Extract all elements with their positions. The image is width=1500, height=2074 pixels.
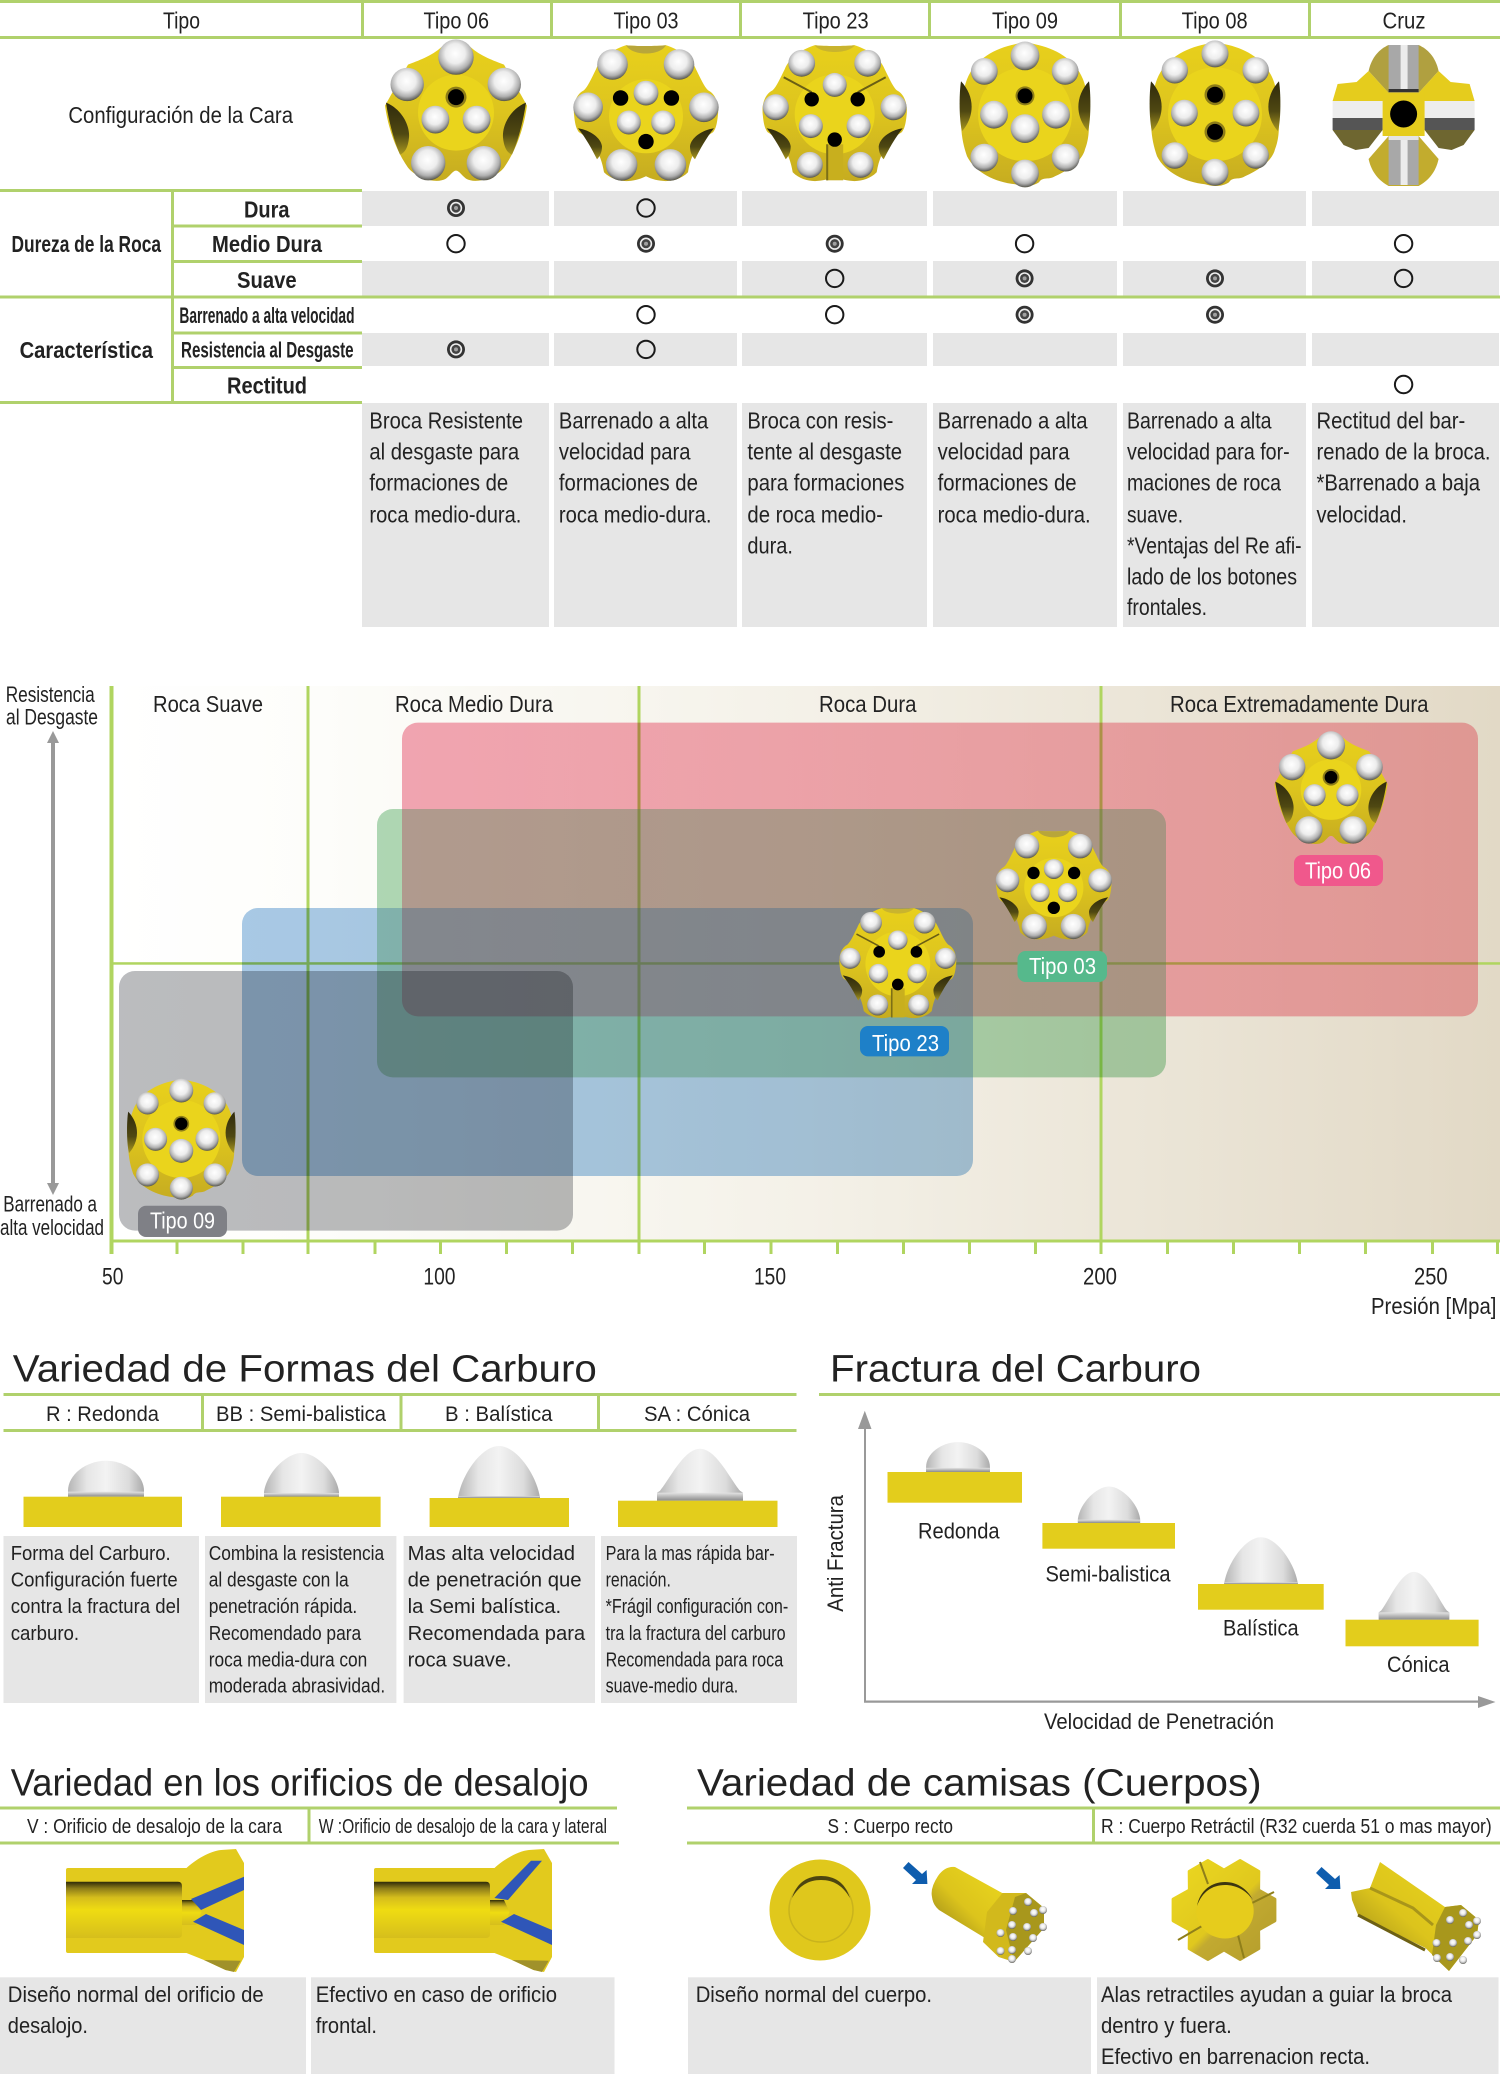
column headers xyxy=(46,1403,750,1426)
y axis bottom label: alta velocidad xyxy=(0,1215,104,1240)
description: semi-ballistic: roca media-dura con xyxy=(209,1650,367,1672)
icon: conical carbide xyxy=(618,1449,778,1527)
description: straight body xyxy=(688,1977,1091,2074)
column header: straight body: S : Cuerpo recto xyxy=(828,1816,953,1838)
description: Tipo 03: formaciones de xyxy=(559,470,698,496)
description: face hole xyxy=(0,1977,306,2074)
description: retrac body xyxy=(1097,1977,1498,2074)
icon: ballistic carbide xyxy=(430,1446,569,1527)
description: Tipo 03 xyxy=(559,408,712,527)
item: conical: Cónica xyxy=(1387,1652,1450,1677)
arrow: straight body xyxy=(903,1862,927,1884)
row label: wear resistance: Resistencia al Desgaste xyxy=(181,338,354,362)
description: Tipo 08: maciones de roca xyxy=(1127,470,1281,496)
description: Tipo 03: velocidad para xyxy=(559,439,691,465)
y axis top label xyxy=(6,682,98,730)
description: conical: Para la mas rápida bar- xyxy=(606,1543,775,1565)
heading: bodies: Variedad de camisas (Cuerpos) xyxy=(697,1763,1262,1805)
column headers: SA : Cónica xyxy=(644,1403,750,1426)
icon: bit Tipo 06 xyxy=(385,39,527,181)
y axis bottom label xyxy=(0,1192,104,1240)
description: Tipo 08: *Ventajas del Re afi- xyxy=(1127,532,1302,558)
x axis numbers: 100 xyxy=(423,1264,456,1290)
header row: Tipo 03 xyxy=(614,8,678,34)
description: retrac body: Efectivo en barrenacion recta. xyxy=(1101,2044,1370,2069)
description: round xyxy=(4,1536,199,1703)
rating marks: open and double circles xyxy=(447,199,1412,393)
description: conical xyxy=(601,1536,797,1703)
icon: bit Tipo 03 xyxy=(573,45,719,181)
y axis bottom label: Barrenado a xyxy=(3,1192,98,1217)
row label: soft: Suave xyxy=(237,267,297,293)
description: semi-ballistic: al desgaste con la xyxy=(209,1570,349,1592)
description: Tipo 23: Broca con resis- xyxy=(747,408,893,434)
header row: Tipo 23 xyxy=(803,8,869,34)
description: ballistic: de penetración que xyxy=(408,1570,582,1592)
row group label: rock hardness: Dureza de la Roca xyxy=(12,231,161,257)
arrow: y axis xyxy=(47,731,59,1195)
item: semi-ballistic: Semi-balistica xyxy=(1046,1562,1171,1587)
y axis top label: al Desgaste xyxy=(6,705,98,730)
description: round: Configuración fuerte xyxy=(11,1570,178,1592)
tag: Tipo 23: Tipo 23 xyxy=(872,1030,939,1056)
description: Cruz xyxy=(1316,408,1490,527)
description: semi-ballistic: penetración rápida. xyxy=(209,1596,357,1618)
description: face and side hole xyxy=(311,1977,614,2074)
arrow: vertical axis xyxy=(858,1411,872,1702)
description: ballistic: la Semi balística. xyxy=(408,1596,561,1618)
zone label: hard rock: Roca Dura xyxy=(819,691,917,717)
arrow: retrac body xyxy=(1316,1867,1340,1889)
row label: medium hard: Medio Dura xyxy=(212,231,322,257)
icon: retrac body end view xyxy=(1173,1860,1275,1960)
icon: retrac body bit xyxy=(1351,1862,1481,1971)
item: round: Redonda xyxy=(918,1518,1000,1543)
icon: bit Tipo 08 xyxy=(1150,40,1280,186)
tag: Tipo 06: Tipo 06 xyxy=(1305,857,1371,883)
item: semi-ballistic xyxy=(1042,1486,1175,1587)
item: conical xyxy=(1346,1572,1479,1677)
description: ballistic: Mas alta velocidad xyxy=(408,1543,575,1565)
column headers: R : Redonda xyxy=(46,1403,159,1426)
description: Tipo 06: formaciones de xyxy=(369,470,508,496)
panel: body variety xyxy=(687,1763,1500,2074)
description: straight body: Diseño normal del cuerpo. xyxy=(696,1982,932,2007)
panel: carbide fracture chart xyxy=(819,1349,1500,1734)
description: Tipo 06 xyxy=(369,408,523,527)
x axis numbers xyxy=(102,1264,1448,1290)
description: round: carburo. xyxy=(11,1623,79,1645)
icon: bit Tipo 23 in chart xyxy=(839,908,956,1018)
row label: hard: Dura xyxy=(244,196,290,222)
panel: flushing hole variety xyxy=(0,1763,619,2074)
header row: Tipo 08 xyxy=(1182,8,1248,34)
description: conical: tra la fractura del carburo xyxy=(606,1623,786,1645)
item: round xyxy=(888,1442,1022,1543)
description: Tipo 09: roca medio-dura. xyxy=(938,501,1091,527)
arrow: horizontal axis xyxy=(864,1696,1496,1708)
description: Cruz: Rectitud del bar- xyxy=(1316,408,1465,434)
panel: bit type comparison table xyxy=(0,0,1500,627)
column headers: BB : Semi-balistica xyxy=(216,1403,386,1426)
description: ballistic: roca suave. xyxy=(408,1650,512,1672)
icon: bit Tipo 06 in chart xyxy=(1274,731,1388,844)
range: Tipo 09 xyxy=(119,971,573,1231)
column header: face hole: V : Orificio de desalojo de la cara xyxy=(27,1816,283,1838)
y axis top label: Resistencia xyxy=(6,682,95,707)
description: semi-ballistic xyxy=(205,1536,396,1703)
icon: straight body bit xyxy=(932,1867,1047,1963)
axis title: anti fracture: Anti Fractura xyxy=(823,1494,848,1612)
row group label: characteristic: Característica xyxy=(20,337,153,363)
icon: bit Tipo 23 xyxy=(763,45,907,181)
header row: Cruz xyxy=(1382,8,1426,34)
x axis numbers: 50 xyxy=(102,1264,123,1290)
row label: high speed drilling: Barrenado a alta velocidad xyxy=(179,303,354,328)
description: conical: renación. xyxy=(606,1570,671,1592)
panel: rock hardness vs. pressure chart xyxy=(0,682,1500,1319)
description: Tipo 08: Barrenado a alta xyxy=(1127,408,1272,434)
description: conical: Recomendada para roca xyxy=(606,1650,784,1672)
description: Tipo 08: frontales. xyxy=(1127,594,1207,620)
item: ballistic xyxy=(1198,1537,1324,1641)
zone label: soft rock: Roca Suave xyxy=(153,691,263,717)
description: Tipo 08: lado de los botones xyxy=(1127,564,1297,590)
heading: carbide shapes: Variedad de Formas del Carburo xyxy=(13,1349,597,1391)
icon: semi-ballistic carbide xyxy=(221,1453,381,1527)
description: round: Forma del Carburo. xyxy=(11,1543,171,1565)
column headers: B : Balística xyxy=(445,1403,553,1426)
grey row and description cells xyxy=(362,191,1499,627)
heading: carbide fracture: Fractura del Carburo xyxy=(830,1349,1201,1391)
column header: face and side hole: W :Orificio de desalojo de la cara y lateral xyxy=(319,1816,607,1838)
icon: face and side flushing section xyxy=(374,1849,552,1972)
icon: bit Tipo 09 in chart xyxy=(127,1079,236,1200)
header row: Tipo 09 xyxy=(992,8,1058,34)
description: face hole: desalojo. xyxy=(8,2013,88,2038)
description: Tipo 06: Broca Resistente xyxy=(369,408,523,434)
description: Tipo 06: al desgaste para xyxy=(369,439,519,465)
description: Tipo 03: Barrenado a alta xyxy=(559,408,708,434)
icon: bit Tipo 09 xyxy=(960,42,1090,187)
description: face and side hole: frontal. xyxy=(316,2013,377,2038)
description: round: contra la fractura del xyxy=(11,1596,180,1618)
description: Tipo 23 xyxy=(747,408,904,558)
icon: face flushing section xyxy=(66,1849,244,1972)
description: Cruz: velocidad. xyxy=(1316,501,1407,527)
description: Tipo 23: dura. xyxy=(747,532,793,558)
tag: Tipo 09: Tipo 09 xyxy=(150,1208,215,1234)
description: Tipo 09: velocidad para xyxy=(938,439,1070,465)
range: Tipo 06 xyxy=(402,723,1478,1016)
description: Cruz: *Barrenado a baja xyxy=(1316,470,1480,496)
heading: flushing holes: Variedad en los orificios de desalojo xyxy=(11,1763,589,1805)
icon: round carbide xyxy=(24,1461,182,1527)
range: Tipo 23 xyxy=(242,908,973,1176)
zone label: extremely hard rock: Roca Extremadamente Dura xyxy=(1170,691,1429,717)
description: Tipo 06: roca medio-dura. xyxy=(369,501,521,527)
description: face and side hole: Efectivo en caso de orificio xyxy=(316,1982,557,2007)
description: Tipo 03: roca medio-dura. xyxy=(559,501,712,527)
header row xyxy=(163,8,1426,34)
description: Tipo 09: formaciones de xyxy=(938,470,1077,496)
axis title: penetration speed: Velocidad de Penetración xyxy=(1044,1709,1274,1734)
description: face hole: Diseño normal del orificio de xyxy=(8,1982,264,2007)
row label: straightness: Rectitud xyxy=(227,372,307,398)
description: ballistic: Recomendada para xyxy=(408,1623,586,1645)
x axis numbers: 250 xyxy=(1414,1264,1448,1290)
icon: straight body end view xyxy=(770,1860,870,1960)
description: Tipo 08 xyxy=(1127,408,1302,620)
icon: bit Tipo 03 in chart xyxy=(996,831,1112,939)
x axis numbers: 200 xyxy=(1083,1264,1117,1290)
description: Tipo 09: Barrenado a alta xyxy=(938,408,1088,434)
description: ballistic xyxy=(404,1536,595,1703)
description: Tipo 08: velocidad para for- xyxy=(1127,439,1290,465)
x axis numbers: 150 xyxy=(754,1264,786,1290)
description: retrac body: dentro y fuera. xyxy=(1101,2013,1232,2038)
description: conical: *Frágil configuración con- xyxy=(606,1596,788,1618)
zone label: medium hard rock: Roca Medio Dura xyxy=(395,691,553,717)
icon: bit Cruz xyxy=(1333,45,1475,186)
header row: Tipo xyxy=(163,8,200,34)
tag: Tipo 03: Tipo 03 xyxy=(1029,953,1096,979)
header row: Tipo 06 xyxy=(424,8,489,34)
description: semi-ballistic: moderada abrasividad. xyxy=(209,1676,385,1698)
description: Tipo 23: de roca medio- xyxy=(747,501,883,527)
description: Tipo 23: para formaciones xyxy=(747,470,904,496)
description: conical: suave-medio dura. xyxy=(606,1676,738,1698)
row label: face configuration: Configuración de la Cara xyxy=(68,102,293,128)
range: Tipo 03 xyxy=(377,809,1166,1077)
description: retrac body: Alas retractiles ayudan a guiar la broca xyxy=(1101,1982,1453,2007)
description: Tipo 09 xyxy=(938,408,1091,527)
item: ballistic: Balística xyxy=(1223,1616,1299,1641)
description: semi-ballistic: Recomendado para xyxy=(209,1623,362,1645)
panel: carbide shape variety xyxy=(4,1349,797,1703)
description: Tipo 23: tente al desgaste xyxy=(747,439,902,465)
description: semi-ballistic: Combina la resistencia xyxy=(209,1543,385,1565)
description: Tipo 08: suave. xyxy=(1127,501,1183,527)
